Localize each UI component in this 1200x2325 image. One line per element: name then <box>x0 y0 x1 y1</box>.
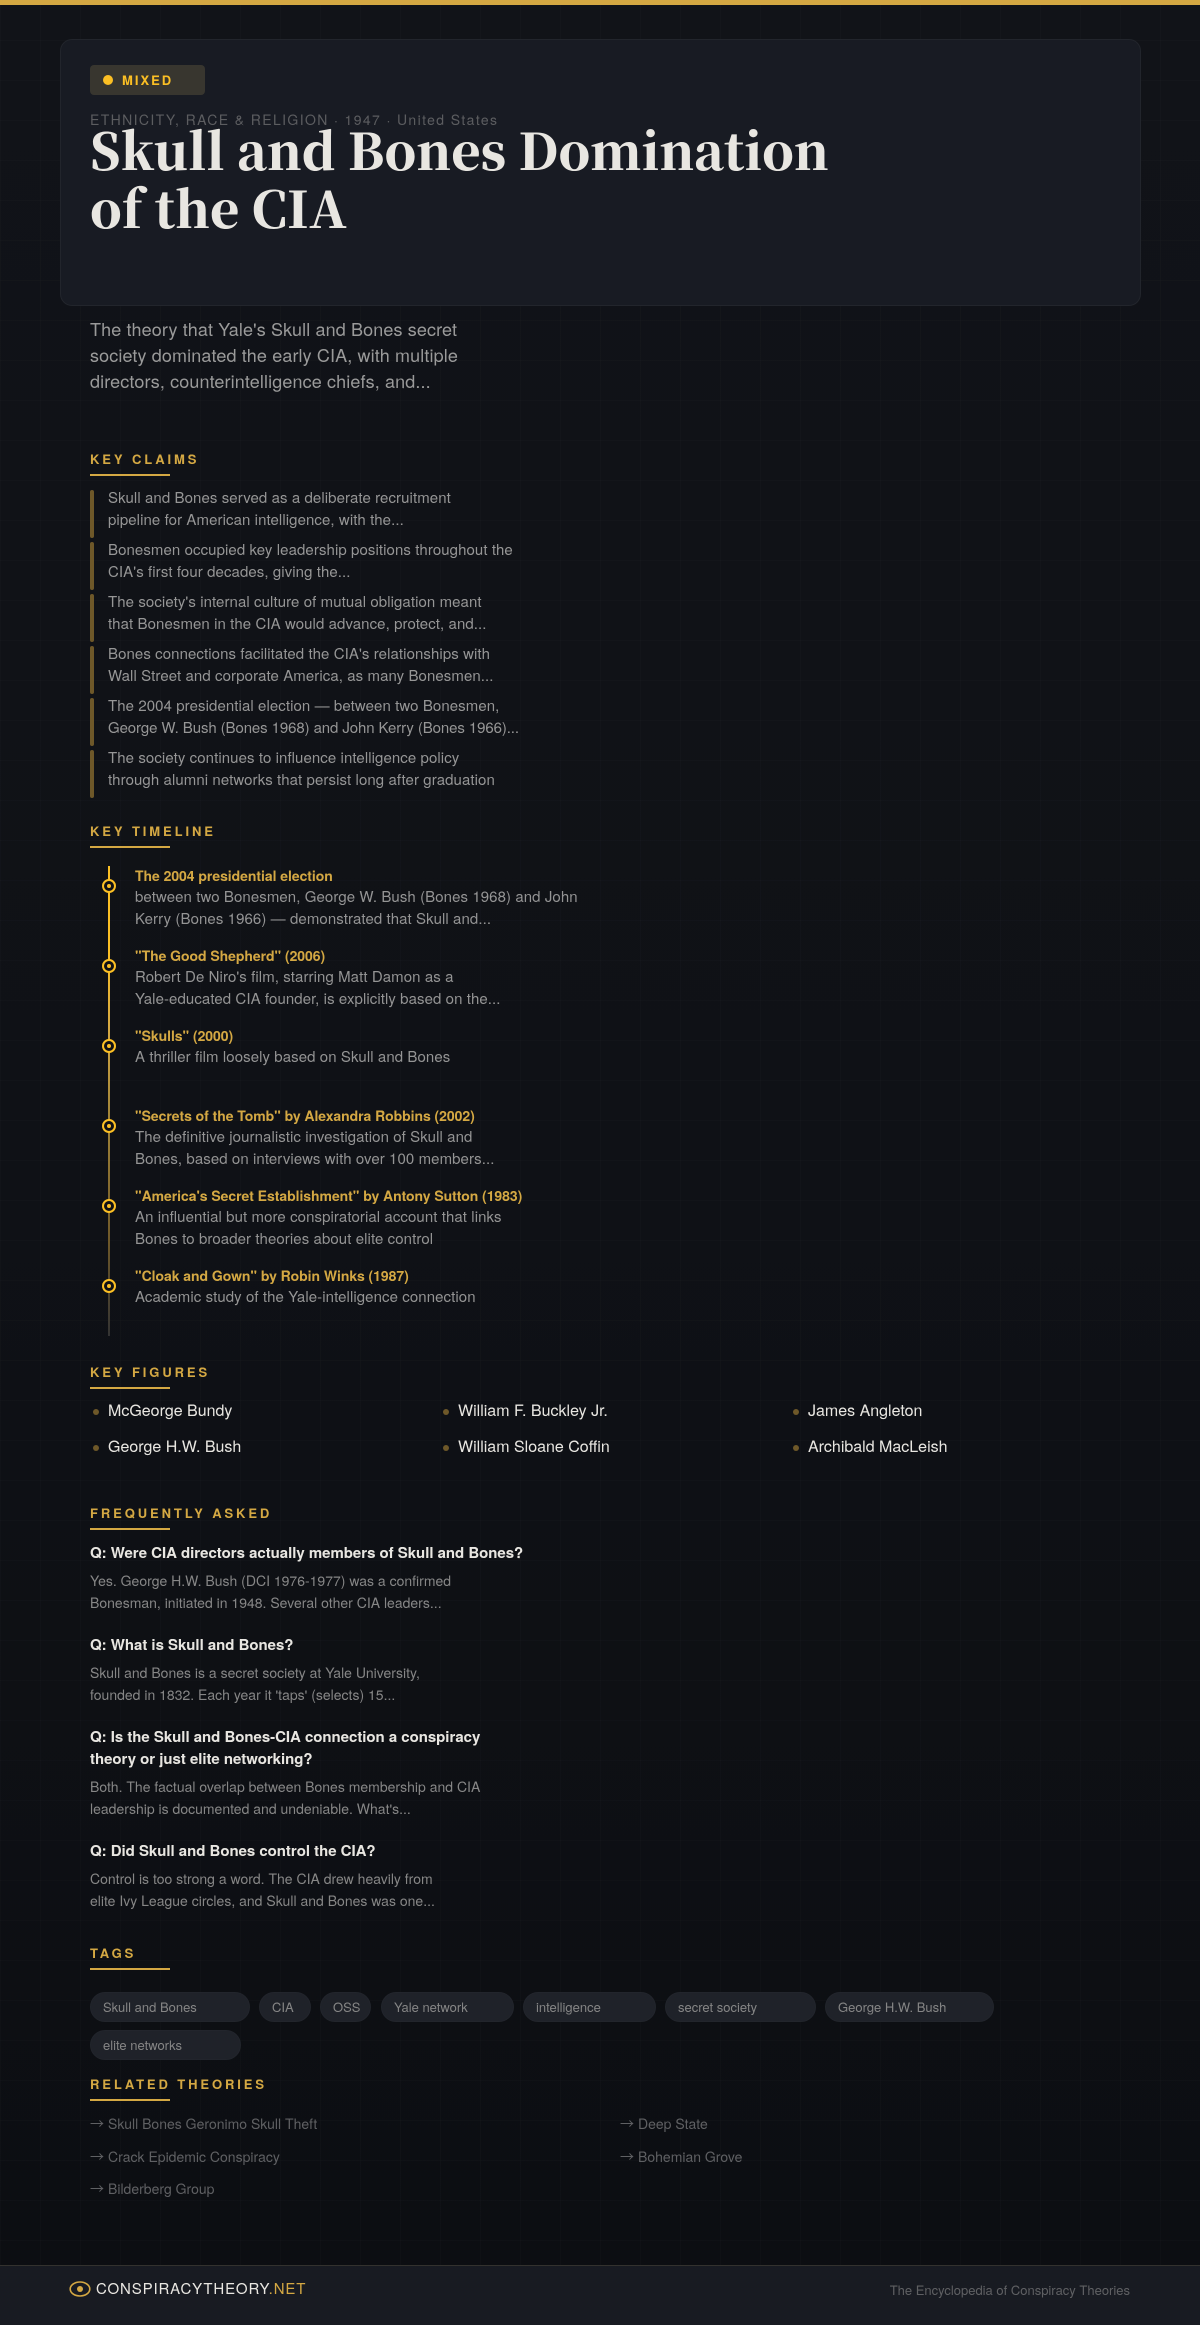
related: Deep State: → <box>620 2114 634 2134</box>
tag: George H.W. Bush <box>825 1992 994 2022</box>
answer 4 <box>90 1868 435 1910</box>
heading: tags: TAGS <box>90 1943 136 1962</box>
tag: elite networks <box>90 2030 241 2060</box>
claim 1 <box>90 487 451 538</box>
timeline event 4: The definitive journalistic investigation of Skull and <box>135 1126 472 1147</box>
timeline event 6: "Cloak and Gown" by Robin Winks (1987) <box>135 1266 409 1286</box>
answer 4: elite Ivy League circles, and Skull and Bones was one... <box>90 1890 435 1910</box>
summary text: society dominated the early CIA, with multiple <box>90 342 458 368</box>
figure: William Sloane Coffin: William Sloane Coffin <box>458 1434 610 1457</box>
timeline dot 6 <box>102 1279 116 1293</box>
summary text: directors, counterintelligence chiefs, and... <box>90 368 431 394</box>
tag: Yale network <box>381 1992 514 2022</box>
claim 2 <box>90 539 513 590</box>
claim 4: Wall Street and corporate America, as many Bonesmen... <box>108 665 494 686</box>
timeline event 6 <box>135 1266 476 1307</box>
summary text: The theory that Yale's Skull and Bones secret <box>90 316 457 342</box>
timeline dot 1 <box>102 879 116 893</box>
related: Crack Epidemic Conspiracy: Crack Epidemic Conspiracy <box>108 2146 280 2166</box>
claim 3 <box>90 591 487 642</box>
answer 4: Control is too strong a word. The CIA drew heavily from <box>90 1868 433 1888</box>
tag: secret society <box>665 1992 816 2022</box>
tag: Skull and Bones <box>90 1992 250 2022</box>
timeline dot 2 <box>102 959 116 973</box>
timeline event 2 <box>135 946 501 1009</box>
question 3 <box>90 1725 480 1769</box>
claim 6 <box>90 747 495 798</box>
figure: George H.W. Bush: George H.W. Bush <box>108 1434 241 1457</box>
question 1: Q: Were CIA directors actually members of Skull and Bones? <box>90 1541 523 1563</box>
heading: related theories: RELATED THEORIES <box>90 2074 267 2093</box>
question 2: Q: What is Skull and Bones? <box>90 1633 293 1655</box>
tag: elite networks: elite networks <box>103 2035 182 2054</box>
claim 3: that Bonesmen in the CIA would advance, protect, and... <box>108 613 487 634</box>
timeline event 3: "Skulls" (2000) <box>135 1026 233 1046</box>
related: Bilderberg Group: Bilderberg Group <box>108 2178 214 2198</box>
claim 4 <box>90 643 494 694</box>
panel: hero card <box>60 39 1141 306</box>
figure: McGeorge Bundy: McGeorge Bundy <box>108 1398 232 1421</box>
heading: frequently asked: FREQUENTLY ASKED <box>90 1503 272 1522</box>
claim 2: CIA's first four decades, giving the... <box>108 561 351 582</box>
timeline event 2: "The Good Shepherd" (2006) <box>135 946 325 966</box>
timeline event 3 <box>135 1026 450 1067</box>
timeline event 1: between two Bonesmen, George W. Bush (Bones 1968) and John <box>135 886 578 907</box>
tag: Yale network: Yale network <box>394 1997 468 2016</box>
timeline dot 5 <box>102 1199 116 1213</box>
footer tagline: The Encyclopedia of Conspiracy Theories <box>890 2280 1130 2299</box>
question 3: theory or just elite networking? <box>90 1747 312 1769</box>
timeline event 2: Yale-educated CIA founder, is explicitly based on the... <box>135 988 501 1009</box>
claims list <box>90 487 519 798</box>
claim 6: through alumni networks that persist long after graduation <box>108 769 495 790</box>
footer logo text: CONSPIRACYTHEORY.NET <box>96 2278 306 2299</box>
heading: key timeline: KEY TIMELINE <box>90 821 216 840</box>
timeline dot 4 <box>102 1119 116 1133</box>
timeline event 3: A thriller film loosely based on Skull and Bones <box>135 1046 450 1067</box>
claim 5: George W. Bush (Bones 1968) and John Kerry (Bones 1966)... <box>108 717 519 738</box>
question 4: Q: Did Skull and Bones control the CIA? <box>90 1839 376 1861</box>
tag: CIA <box>259 1992 311 2022</box>
tag: OSS: OSS <box>333 1997 360 2016</box>
answer 2 <box>90 1662 420 1704</box>
timeline event 5 <box>135 1186 522 1249</box>
timeline event 4 <box>135 1106 494 1169</box>
timeline dot 3 <box>102 1039 116 1053</box>
figure: Archibald MacLeish: Archibald MacLeish <box>808 1434 948 1457</box>
badge: mixed rating: MIXED <box>122 70 173 89</box>
related: Deep State: Deep State <box>638 2113 708 2133</box>
footer <box>0 2265 1200 2325</box>
tag: George H.W. Bush: George H.W. Bush <box>838 1997 946 2016</box>
heading: key figures: KEY FIGURES <box>90 1362 210 1381</box>
timeline event 4: Bones, based on interviews with over 100 members... <box>135 1148 494 1169</box>
tag: intelligence <box>523 1992 656 2022</box>
claim 4: Bones connections facilitated the CIA's relationships with <box>108 643 490 664</box>
answer 1: Yes. George H.W. Bush (DCI 1976-1977) was a confirmed <box>90 1570 451 1590</box>
top accent bar <box>0 0 1200 5</box>
claim 2: Bonesmen occupied key leadership positions throughout the <box>108 539 513 560</box>
timeline line <box>108 866 110 1336</box>
answer 1 <box>90 1570 451 1612</box>
timeline event 1: Kerry (Bones 1966) — demonstrated that Skull and... <box>135 908 491 929</box>
claim 6: The society continues to influence intelligence policy <box>108 747 459 768</box>
related: Bohemian Grove: → <box>620 2147 634 2167</box>
tag: secret society: secret society <box>678 1997 757 2016</box>
tag: intelligence: intelligence <box>536 1997 601 2016</box>
heading: key claims: KEY CLAIMS <box>90 449 199 468</box>
title: of the CIA <box>90 171 347 243</box>
title: Skull and Bones Domination <box>90 113 829 185</box>
title <box>90 113 829 243</box>
tag: OSS <box>320 1992 371 2022</box>
timeline event 4: "Secrets of the Tomb" by Alexandra Robbins (2002) <box>135 1106 475 1126</box>
answer 2: founded in 1832. Each year it 'taps' (selects) 15... <box>90 1684 395 1704</box>
figure: William F. Buckley Jr.: William F. Buckley Jr. <box>458 1398 608 1421</box>
question 3: Q: Is the Skull and Bones-CIA connection a conspiracy <box>90 1725 480 1747</box>
related: Crack Epidemic Conspiracy: → <box>90 2147 104 2167</box>
timeline event 2: Robert De Niro's film, starring Matt Damon as a <box>135 966 454 987</box>
timeline event 5: "America's Secret Establishment" by Antony Sutton (1983) <box>135 1186 522 1206</box>
claim 1: Skull and Bones served as a deliberate recruitment <box>108 487 451 508</box>
timeline event 5: Bones to broader theories about elite control <box>135 1228 433 1249</box>
related: Bohemian Grove: Bohemian Grove <box>638 2146 742 2166</box>
related: Skull Bones Geronimo Skull Theft: → <box>90 2114 104 2134</box>
answer 3: Both. The factual overlap between Bones membership and CIA <box>90 1776 480 1796</box>
category meta line: ETHNICITY, RACE & RELIGION · 1947 · United States <box>90 109 498 129</box>
answer 1: Bonesman, initiated in 1948. Several other CIA leaders... <box>90 1592 442 1612</box>
answer 3: leadership is documented and undeniable. What's... <box>90 1798 411 1818</box>
related: Skull Bones Geronimo Skull Theft: Skull Bones Geronimo Skull Theft <box>108 2113 317 2133</box>
tag: CIA: CIA <box>272 1997 294 2016</box>
claim 1: pipeline for American intelligence, with the... <box>108 509 404 530</box>
related: Bilderberg Group: → <box>90 2179 104 2199</box>
icon: eye logo <box>69 2281 91 2297</box>
timeline event 1 <box>135 866 578 929</box>
claim 5: The 2004 presidential election — between two Bonesmen, <box>108 695 499 716</box>
timeline event 1: The 2004 presidential election <box>135 866 333 886</box>
summary text <box>90 316 458 394</box>
figure: James Angleton: James Angleton <box>808 1398 922 1421</box>
answer 2: Skull and Bones is a secret society at Yale University, <box>90 1662 420 1682</box>
claim 5 <box>90 695 519 746</box>
timeline event 5: An influential but more conspiratorial account that links <box>135 1206 502 1227</box>
badge: mixed rating <box>90 65 205 95</box>
answer 3 <box>90 1776 480 1818</box>
tag: Skull and Bones: Skull and Bones <box>103 1997 197 2016</box>
claim 3: The society's internal culture of mutual obligation meant <box>108 591 482 612</box>
timeline event 6: Academic study of the Yale-intelligence connection <box>135 1286 476 1307</box>
